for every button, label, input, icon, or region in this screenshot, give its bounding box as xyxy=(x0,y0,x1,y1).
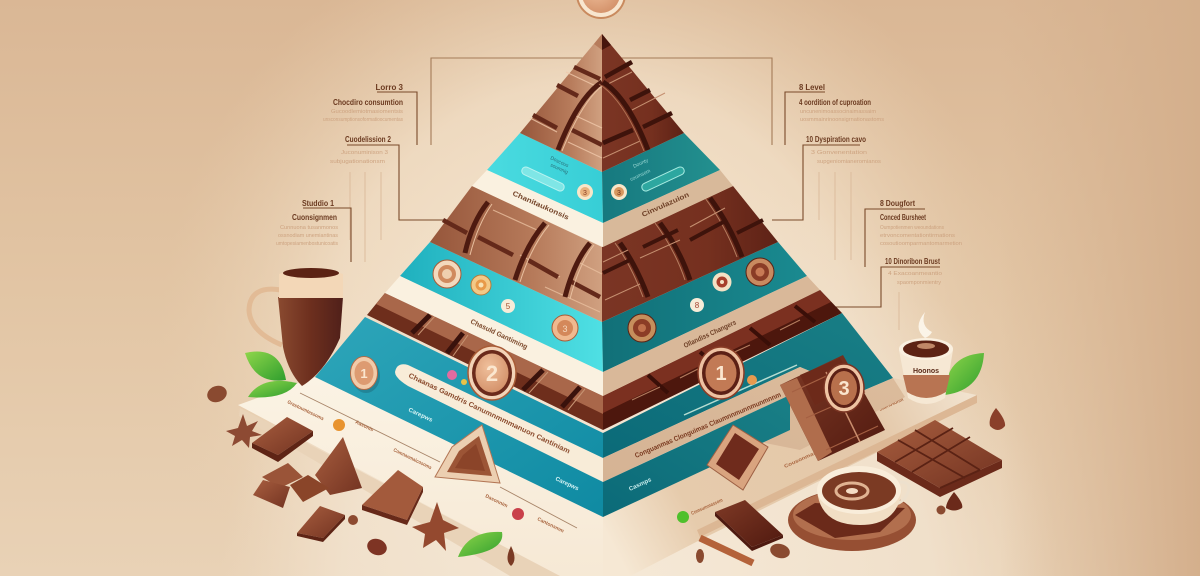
plate rules and captions: Saenosonm xyxy=(878,397,905,413)
plate rules and captions: Cousonmas xyxy=(783,450,818,470)
chocolate bar with coin 3 xyxy=(780,355,885,461)
callout: right level 8: uosmmainrinoonsigrnationastoms xyxy=(800,117,884,123)
pill left xyxy=(520,166,566,192)
callouts: left side xyxy=(276,83,462,262)
plate lip xyxy=(239,408,560,576)
callout: level 1 xyxy=(276,199,351,262)
cup xyxy=(817,466,909,525)
coin 3: 3 xyxy=(838,378,850,400)
piece xyxy=(715,500,783,551)
plate rules and captions: Comnanmaicosoms xyxy=(392,447,433,471)
callout: right doughnut: Conced Bursheet xyxy=(880,213,926,222)
coin small: 5 xyxy=(506,302,511,311)
coin small xyxy=(501,299,515,313)
coin left xyxy=(577,184,593,200)
tier 3: pill band left: Carepws xyxy=(554,476,580,493)
callout: right doughnut: 8 Dougfort xyxy=(880,199,915,208)
plate rules and captions: Comsummassom xyxy=(690,497,724,517)
callout: right level 8: 4 oordition of cuproation xyxy=(799,98,871,107)
coin: 3 xyxy=(562,324,568,334)
callout: right doughnut: etrvoncomentationtirmations xyxy=(880,233,955,239)
callout: right dyspiration: 10 Dyspiration cavo xyxy=(806,135,866,144)
callout: level 3: Gucoodlemiotmasiomentsis xyxy=(331,109,403,115)
tier 2 chocolate xyxy=(430,186,778,322)
pyramid xyxy=(315,34,905,517)
leaf xyxy=(945,353,984,395)
plate left xyxy=(238,377,603,576)
beans xyxy=(205,383,514,566)
callout: right dyspiration: 3 Gonvenentation xyxy=(811,150,867,156)
coin 1 left: 1 xyxy=(360,366,368,381)
beans xyxy=(696,408,1005,563)
coin small xyxy=(690,298,704,312)
cluster xyxy=(253,463,329,508)
callout: level 3: Lorro 3 xyxy=(375,83,404,92)
cup body xyxy=(278,297,343,386)
pill right xyxy=(640,166,686,192)
coin 1 left xyxy=(350,356,380,393)
tier 2 coins left xyxy=(433,260,578,341)
callout: level 2 xyxy=(330,135,462,220)
callout: right dinoribon: 4 Exacoanmeantio xyxy=(888,271,942,277)
callout: right level 8 xyxy=(785,83,884,145)
tier 3: pill band right: Casmps xyxy=(628,477,653,493)
callout: level 1: umtopesiamenbostunicoatis xyxy=(276,241,338,247)
coin medium xyxy=(712,272,732,292)
coin small: 8 xyxy=(695,301,700,310)
callout: level 3 xyxy=(323,83,417,145)
tier 1 white band: Cinvulazuion xyxy=(641,192,690,219)
right scattered chocolates and saucer xyxy=(696,408,1005,563)
callout: level 1: Cunnuona tusanmonos xyxy=(280,225,338,231)
coin 2: 2 xyxy=(486,361,498,386)
tier 2 white band xyxy=(385,276,820,396)
tier 3: lower left teal xyxy=(315,317,603,517)
tier 3: pill band right xyxy=(603,365,905,517)
tier 3: pill band left: Carepws xyxy=(407,407,434,424)
plate right xyxy=(603,378,977,576)
triangular piece xyxy=(315,437,362,495)
callout: level 2: Juconuminison 3 xyxy=(341,150,388,156)
tier 2 teal band xyxy=(400,242,807,372)
callout: right doughnut xyxy=(865,199,962,267)
callouts: right side xyxy=(772,83,962,307)
coin left: 3 xyxy=(583,190,587,197)
coin right: 3 xyxy=(617,190,621,197)
callout: right dyspiration: supgeniomianeromianos xyxy=(817,159,881,165)
tier 1 teal band: soumnig xyxy=(549,162,569,176)
tier 2 white band: Chasuld Gantiming xyxy=(469,318,528,351)
leaf xyxy=(458,532,502,557)
callout: right dinoribon: spaomponmientry xyxy=(897,280,941,286)
coin xyxy=(552,315,578,341)
star anise xyxy=(412,502,459,551)
tier 3 coins xyxy=(350,346,744,400)
right coffee cup xyxy=(899,312,984,404)
callout: level 1: Cuonsignmen xyxy=(292,213,337,222)
coin 1 right xyxy=(698,347,744,399)
callout: level 3: Chocdiro consumtion xyxy=(333,98,403,107)
triangle chocolate piece xyxy=(435,425,500,483)
handle xyxy=(249,289,282,345)
tier 1 white band: Chanitaukonsis xyxy=(511,190,570,222)
callout: level 2: Cuodelission 2 xyxy=(345,135,391,144)
tier 3: pill band left xyxy=(395,364,603,493)
leaves xyxy=(245,352,297,397)
tier 3 chocolate blocks xyxy=(367,290,842,430)
plate rules and captions: Cantonsmm xyxy=(536,516,565,535)
coin xyxy=(628,314,656,342)
saucer xyxy=(788,489,916,551)
coin 2 xyxy=(468,346,516,400)
plate rules and captions: Grastoumtessoms xyxy=(286,399,325,422)
callout: right doughnut: cosoutioomparmantomarmetion xyxy=(880,241,962,247)
rim band xyxy=(279,268,343,298)
callout: right dinoribon xyxy=(828,257,942,307)
tier 3: pill band left: Chaanas Gamdris Canumnmmmanuon Cantiniam xyxy=(407,372,571,455)
left scattered chocolate pieces xyxy=(205,383,514,566)
tier 1 teal band xyxy=(487,133,720,223)
steam xyxy=(918,312,932,338)
tier 1 white band xyxy=(472,170,733,247)
callout: level 1: Studdio 1 xyxy=(302,199,334,208)
callout: right dyspiration xyxy=(772,135,881,220)
base plate xyxy=(238,377,977,576)
cup xyxy=(899,350,953,404)
coin large xyxy=(746,258,774,286)
star anise xyxy=(226,414,262,448)
square chocolate piece xyxy=(707,425,768,490)
tier 3: lower right teal xyxy=(603,313,893,458)
coffee xyxy=(283,268,339,278)
tier 3: pill band right: Conguanmas Clonguimas Claumnnmunnmunmnnm xyxy=(634,392,782,460)
coin right xyxy=(611,184,627,200)
plate right lip xyxy=(697,395,977,537)
tier 1 teal band: Dounty xyxy=(632,157,650,170)
tier 1 teal band: coumsom xyxy=(629,168,652,183)
top coin icon xyxy=(577,0,625,18)
piece xyxy=(297,506,345,542)
plate rules and captions xyxy=(286,393,905,535)
plate rules and captions: Aasonis xyxy=(354,419,374,433)
callout: level 1: ossnodiam unemiantinas xyxy=(278,233,338,239)
callout: right dinoribon: 10 Dinoribon Brust xyxy=(885,257,940,266)
tier 2 coins right xyxy=(628,258,774,342)
tier 1 chocolate xyxy=(520,34,684,172)
chocolate bar xyxy=(877,420,1002,497)
callout: right level 8: 8 Level xyxy=(799,83,825,92)
callout: right level 8: uncunenimoassocinaimassaim xyxy=(800,109,876,115)
cinnamon stick xyxy=(700,538,753,563)
tier 2 white band: Ollandiss Changers xyxy=(683,319,738,350)
callout: right doughnut: Oumpotienmen weoundations xyxy=(880,225,944,231)
coin 1 right: 1 xyxy=(715,363,727,385)
coin large xyxy=(433,260,461,288)
right coffee cup: Hoonos xyxy=(913,368,939,375)
callout: level 2: subjugationationsm xyxy=(330,159,385,165)
piece xyxy=(252,417,313,462)
callout: level 3: unsconsumptionsoformatioocumentas xyxy=(323,117,403,123)
coin medium xyxy=(471,275,491,295)
tier 1 teal band: Doscous xyxy=(549,155,570,169)
left coffee cup xyxy=(245,268,343,397)
piece xyxy=(362,470,423,525)
plate rules and captions: Dasonnim xyxy=(484,493,509,510)
connector lines xyxy=(350,58,899,330)
